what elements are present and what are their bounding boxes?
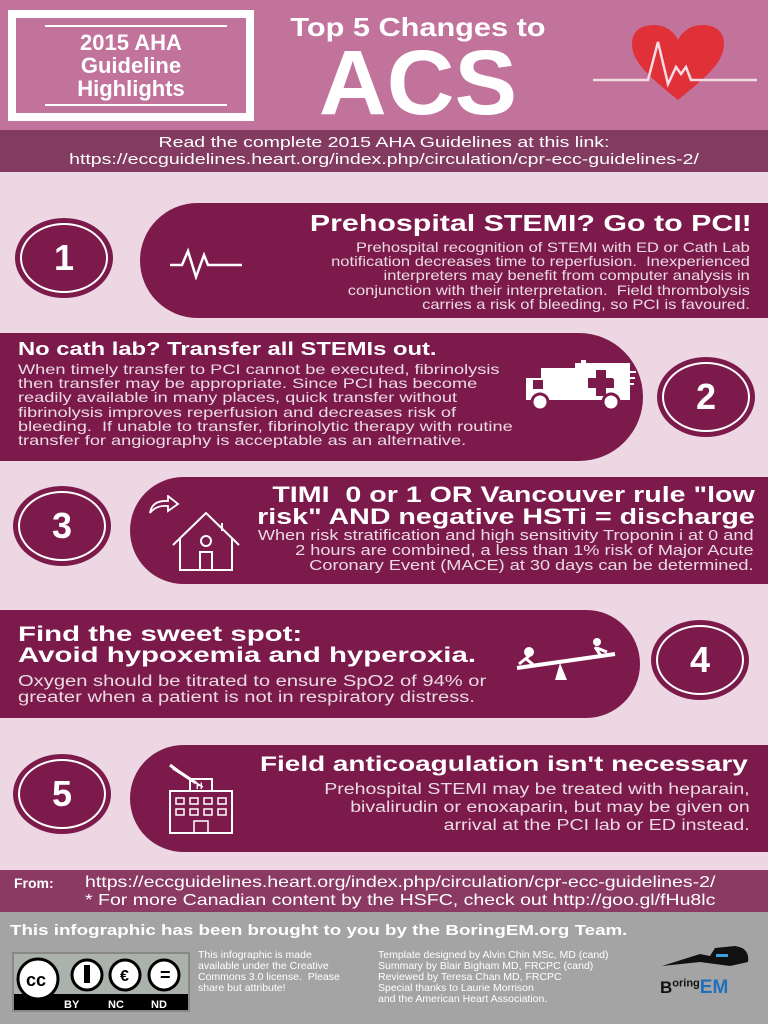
title box: Highlights [77, 76, 185, 101]
heading 3 [257, 482, 755, 529]
panel 3 [130, 477, 768, 584]
heading 3: risk" AND negative HSTi = discharge [257, 504, 755, 529]
panel 1 [140, 203, 768, 318]
icon: syringe and hospital: H [196, 781, 202, 791]
credits: Template designed by Alvin Chin MSc, MD (cand) [378, 949, 609, 961]
credits: Summary by Blair Bigham MD, FRCPC (cand) [378, 960, 593, 972]
license text: Commons 3.0 license. Please [198, 971, 340, 983]
credits: Reviewed by Teresa Chan MD, FRCPC [378, 971, 562, 983]
text 4: Oxygen should be titrated to ensure SpO2 of 94% or [18, 673, 486, 690]
icon: house [149, 495, 240, 571]
text 1: conjunction with their interpretation. Field thrombolysis [348, 282, 750, 298]
heading 2: No cath lab? Transfer all STEMIs out. [18, 339, 437, 359]
icon: seesaw [516, 638, 616, 680]
number 5 [13, 754, 111, 834]
number 1 [15, 218, 113, 298]
text 2 [18, 361, 513, 448]
text 3: When risk stratification and high sensitivity Troponin i at 0 and [258, 528, 754, 544]
text 3: 2 hours are combined, a less than 1% risk of Major Acute [296, 543, 754, 559]
logo: BoringEM: BoringEM [660, 977, 728, 998]
icon: cc license: ND [151, 999, 167, 1011]
panel 5 [130, 745, 768, 852]
credits: and the American Heart Association. [378, 993, 547, 1005]
license text [198, 949, 340, 994]
number 4: 4 [690, 639, 710, 680]
icon: cc license [12, 952, 190, 1012]
title box: 2015 AHA [80, 30, 182, 55]
icon: syringe and hospital [169, 764, 233, 834]
icon: ekg [170, 248, 242, 280]
text 2: bleeding. If unable to transfer, fibrinolytic therapy with routine [18, 418, 513, 434]
text 2: fibrinolysis improves reperfusion and decreases risk of [18, 404, 456, 420]
logo: BoringEM [660, 946, 748, 998]
text 4 [18, 673, 486, 706]
text 1: notification decreases time to reperfusion. Inexperienced [331, 253, 750, 269]
text 5: arrival at the PCI lab or ED instead. [444, 817, 750, 834]
title: Top 5 Changes to [290, 12, 546, 42]
heading 5: Field anticoagulation isn't necessary [260, 753, 748, 776]
from band [0, 870, 768, 912]
text 2: readily available in many places, quick transfer without [18, 389, 457, 405]
text 2: then transfer may be appropriate. Since PCI has become [18, 375, 477, 391]
icon: heart with ekg [593, 25, 757, 100]
text 1: interpreters may benefit from computer analysis in [384, 267, 750, 283]
credits [378, 949, 609, 1005]
link band [0, 130, 768, 172]
text 3: Coronary Event (MACE) at 30 days can be determined. [310, 558, 754, 574]
license text: This infographic is made [198, 949, 312, 961]
icon: cc license: = [160, 965, 171, 985]
text 2: When timely transfer to PCI cannot be executed, fibrinolysis [18, 361, 500, 377]
icon: cc license: BY [64, 999, 80, 1011]
icon: cc license: € [120, 968, 129, 985]
text 4: greater when a patient is not in respiratory distress. [18, 689, 475, 706]
credits: Special thanks to Laurie Morrison [378, 982, 534, 994]
license text: share but attribute! [198, 982, 286, 994]
text 3 [258, 528, 754, 574]
link band: Read the complete 2015 AHA Guidelines at this link: [159, 134, 609, 151]
license text: available under the Creative [198, 960, 329, 972]
footer heading: This infographic has been brought to you by the BoringEM.org Team. [10, 922, 627, 939]
heading 4: Avoid hypoxemia and hyperoxia. [18, 644, 476, 667]
title box: Guideline [81, 53, 181, 78]
text 5 [324, 781, 750, 834]
footer [0, 912, 768, 1024]
title box [8, 10, 254, 121]
from band: https://eccguidelines.heart.org/index.php/circulation/cpr-ecc-guidelines-2/ [85, 874, 715, 891]
text 5: bivalirudin or enoxaparin, but may be given on [350, 799, 750, 816]
from band: From: [14, 875, 54, 891]
from band: * For more Canadian content by the HSFC, check out http://goo.gl/fHu8lc [85, 892, 715, 909]
text 2: transfer for angiography is acceptable as an alternative. [18, 432, 466, 448]
title [290, 12, 546, 134]
panel 2 [0, 333, 643, 461]
heading 4: Find the sweet spot: [18, 623, 302, 646]
title: ACS [319, 32, 517, 134]
heading 4 [18, 623, 476, 667]
icon: cc license: NC [108, 999, 124, 1011]
number 2 [657, 357, 755, 437]
number 3 [13, 486, 111, 566]
text 5: Prehospital STEMI may be treated with heparain, [324, 781, 750, 798]
number 4 [651, 620, 749, 700]
header band [0, 0, 768, 130]
text 1 [331, 239, 750, 312]
heading 3: TIMI 0 or 1 OR Vancouver rule "low [273, 482, 755, 507]
number 2: 2 [696, 376, 716, 417]
heading 1: Prehospital STEMI? Go to PCI! [310, 210, 752, 236]
icon: cc license: cc [26, 970, 46, 990]
number 1: 1 [54, 237, 74, 278]
link band: https://eccguidelines.heart.org/index.php/circulation/cpr-ecc-guidelines-2/ [69, 151, 699, 168]
icon: ambulance [526, 360, 636, 408]
text 1: carries a risk of bleeding, so PCI is favoured. [422, 296, 750, 312]
text 1: Prehospital recognition of STEMI with ED or Cath Lab [356, 239, 750, 255]
number 3: 3 [52, 505, 72, 546]
number 5: 5 [52, 773, 72, 814]
panel 4 [0, 610, 640, 718]
